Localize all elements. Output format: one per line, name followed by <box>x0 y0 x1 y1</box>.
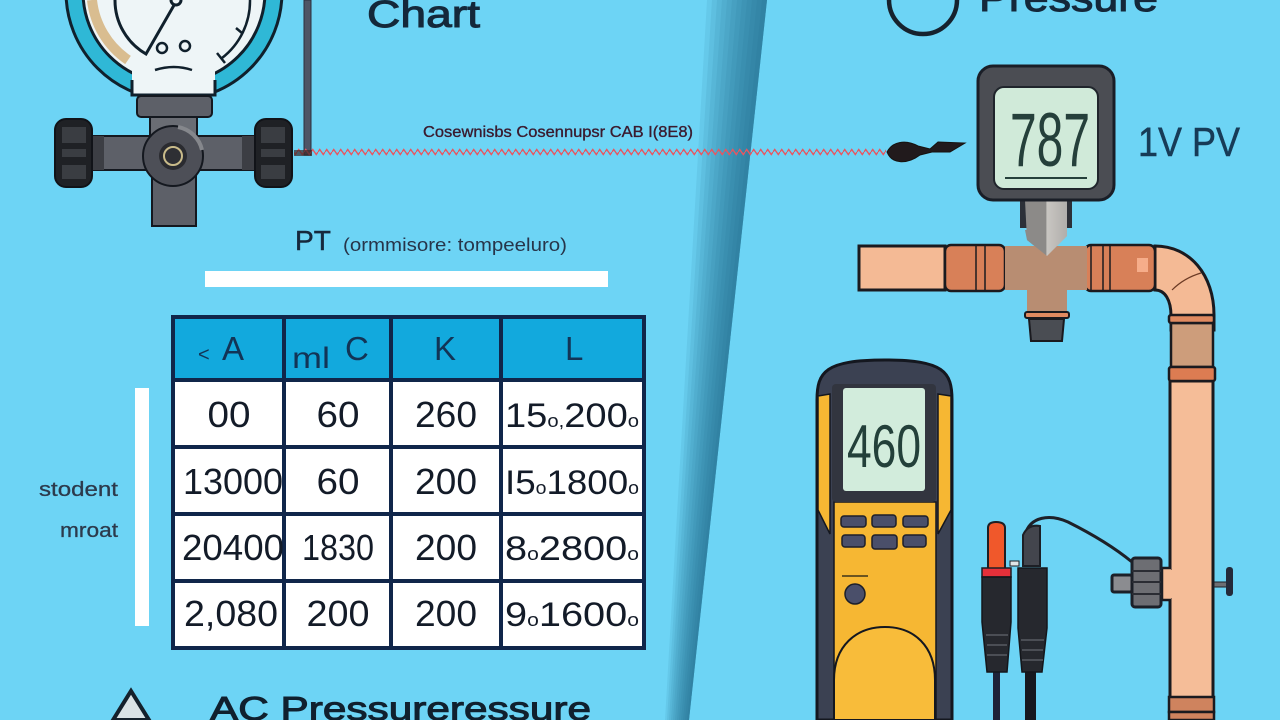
side bar <box>135 388 149 626</box>
PT subtitle: (ormmisore: tompeeluro) <box>343 235 567 255</box>
tan section <box>1171 323 1213 367</box>
PT: PT <box>295 225 331 256</box>
buttons <box>841 515 928 549</box>
column headers: C <box>345 330 369 367</box>
label: V PV: 1V PV <box>1138 119 1241 165</box>
vertical pipe <box>1170 381 1213 720</box>
table values: 200 <box>415 461 477 502</box>
column headers: A <box>222 330 244 367</box>
gauge neck <box>137 96 212 117</box>
side labels <box>39 479 119 542</box>
sensor cable <box>1025 518 1132 562</box>
wire label: Cosewnisbs Cosennupsr CAB I(8E8) <box>423 124 693 141</box>
digital pressure gauge <box>978 66 1114 256</box>
side labels: mroat <box>60 520 119 542</box>
round button <box>845 584 865 604</box>
table values: 20400 <box>182 527 284 568</box>
meter screen <box>843 388 925 491</box>
pipe valve knob <box>1214 567 1233 596</box>
gauge screen <box>994 87 1098 189</box>
table frame <box>173 317 644 648</box>
test leads <box>982 518 1132 720</box>
copper couplings <box>945 245 1155 291</box>
meter reading: 460 <box>847 413 921 480</box>
dome panel <box>834 627 935 720</box>
elbow crease <box>1172 273 1201 290</box>
last column values: 15 o,200 o <box>505 397 639 435</box>
table values: 2,080 <box>184 593 278 634</box>
table values: 200 <box>415 593 477 634</box>
table values: 260 <box>415 394 477 435</box>
vertical grey rod <box>304 0 311 155</box>
table values <box>182 394 477 634</box>
last column values <box>505 397 639 634</box>
table values: 60 <box>316 394 360 435</box>
analog manifold gauge <box>55 0 292 226</box>
table values: 200 <box>415 527 477 568</box>
side grips <box>818 394 951 534</box>
gauge reading: 787 <box>1010 98 1090 183</box>
column headers <box>198 330 583 375</box>
horizontal pipe <box>859 246 945 290</box>
column headers: L <box>565 330 583 367</box>
table values: 13000 <box>183 461 283 502</box>
pipe sensor nut <box>1112 558 1161 607</box>
table values: 200 <box>306 593 370 634</box>
last column values: I5o1800 o <box>505 464 639 502</box>
connecting wire <box>294 148 886 156</box>
tee fitting <box>1005 246 1087 312</box>
column headers: K <box>434 330 456 367</box>
manifold body <box>90 117 256 226</box>
grid lines <box>173 317 644 648</box>
front panel <box>834 502 936 720</box>
table title <box>295 225 567 256</box>
wire probe tip <box>887 142 965 162</box>
probe link <box>1010 561 1019 566</box>
table values: 00 <box>208 394 250 435</box>
side branch <box>1162 568 1171 600</box>
header row <box>175 319 642 379</box>
last column values: 8o2800 o <box>505 530 639 568</box>
screen bezel <box>832 384 936 502</box>
table values: 1830 <box>302 527 374 568</box>
gauge stem <box>1020 200 1072 256</box>
side labels: stodent <box>39 479 119 501</box>
diagonal panel shadow <box>665 0 767 720</box>
title bar <box>205 271 608 287</box>
selector marker <box>842 575 868 577</box>
warning triangle icon <box>113 691 149 720</box>
gauge housing <box>978 66 1114 200</box>
last column values: 9o1600 o <box>505 596 639 634</box>
column headers: < <box>198 344 210 366</box>
column headers: ml <box>292 342 330 375</box>
elbow <box>1155 246 1214 330</box>
collars <box>1169 315 1215 720</box>
multimeter <box>817 360 952 720</box>
right knob <box>255 119 292 187</box>
copper pipe <box>859 230 1215 720</box>
pressure temperature table <box>173 317 644 648</box>
icon: ring arc <box>889 0 957 34</box>
meter body <box>817 360 952 720</box>
gauge dial <box>66 0 282 100</box>
lower fitting <box>1025 312 1069 341</box>
left knob <box>55 119 92 187</box>
reading underline <box>1005 177 1087 179</box>
table values: 60 <box>316 461 360 502</box>
red probe <box>982 522 1011 720</box>
black probe <box>1018 526 1047 720</box>
